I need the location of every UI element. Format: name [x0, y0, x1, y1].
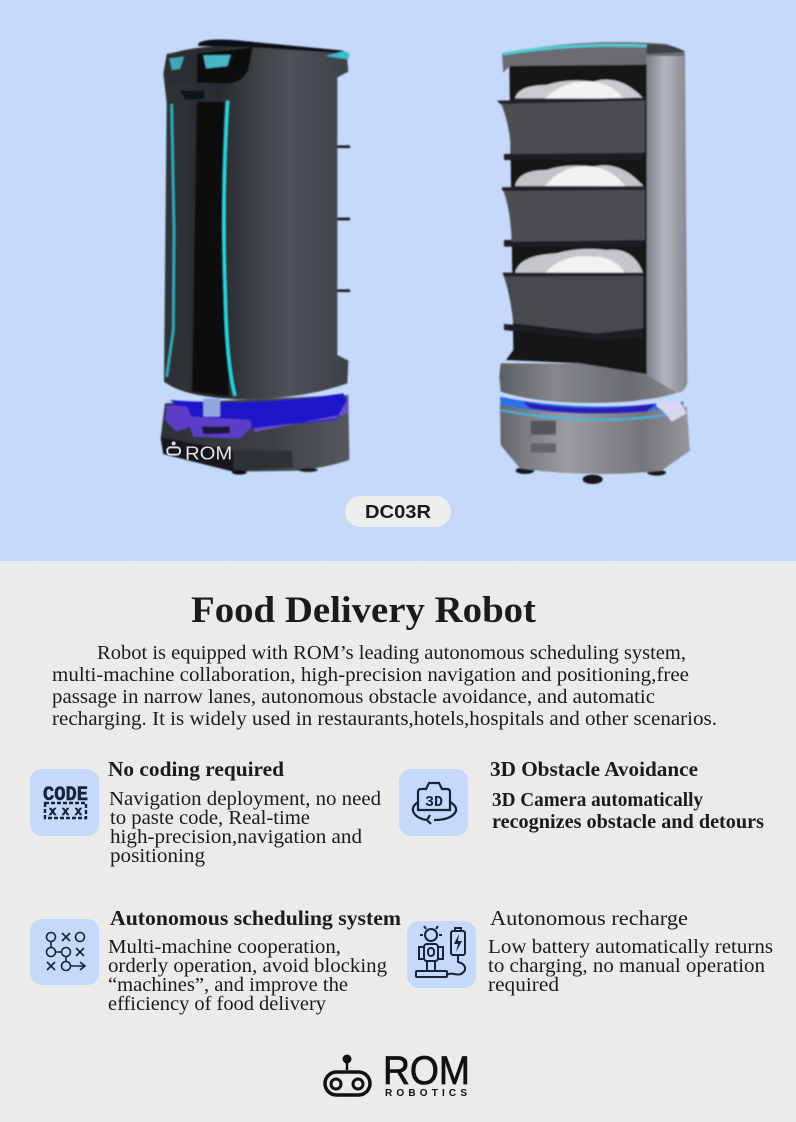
description: autonomous scheduling system: Multi-machine cooperation, [108, 936, 341, 958]
illustration: DC03R robot, open tray view [497, 42, 690, 484]
icon: code: CODE [43, 784, 88, 807]
illustration: DC03R robot, closed front view [161, 39, 350, 475]
title: Food Delivery Robot [191, 590, 537, 631]
icon: 3D camera [399, 769, 468, 836]
description: no coding required: to paste code, Real-time [110, 807, 310, 829]
description: autonomous scheduling system: efficiency of food delivery [108, 993, 326, 1015]
logo on robot base: ROM [185, 442, 232, 463]
feature: autonomous recharge [407, 906, 773, 996]
intro paragraph: Robot is equipped with ROM’s leading autonomous scheduling system, [97, 642, 686, 664]
panel: textured description background [0, 561, 796, 1122]
description: autonomous recharge: required [488, 974, 559, 996]
icon: code [30, 769, 99, 836]
model label pill: DC03R [365, 501, 431, 522]
description: autonomous recharge [488, 936, 773, 996]
model label pill [345, 496, 451, 527]
icon: robot charging [407, 921, 476, 988]
panel: product hero background [0, 0, 796, 561]
icon: code: xxx [49, 803, 83, 818]
description: 3D obstacle avoidance: 3D Camera automatically [492, 789, 703, 811]
intro paragraph: recharging. It is widely used in restaurants,hotels,hospitals and other scenarios. [52, 708, 717, 730]
description: no coding required: high-precision,navigation and [110, 826, 362, 848]
logo on robot base [167, 441, 232, 463]
description: autonomous recharge: Low battery automatically returns [488, 936, 773, 958]
description: autonomous scheduling system: “machines”, and improve the [108, 974, 348, 996]
icon: strategy diagram [30, 919, 99, 985]
description: 3D obstacle avoidance: recognizes obstacle and detours [492, 811, 764, 833]
heading: 3D obstacle avoidance: 3D Obstacle Avoidance [490, 757, 698, 781]
description: no coding required: positioning [110, 845, 205, 867]
feature: autonomous scheduling system [30, 906, 402, 1015]
tagline: ROBOTICS [385, 1088, 467, 1099]
intro paragraph [52, 642, 717, 730]
heading: autonomous recharge: Autonomous recharge [490, 906, 688, 930]
description: autonomous scheduling system [108, 936, 387, 1015]
description: no coding required: Navigation deployment, no need [109, 788, 381, 810]
description: autonomous scheduling system: orderly operation, avoid blocking [108, 955, 387, 977]
wordmark: ROM [383, 1049, 470, 1093]
intro paragraph: passage in narrow lanes, autonomous obstacle avoidance, and automatic [52, 686, 655, 708]
icon: 3D camera: 3D [425, 794, 443, 811]
feature: no coding required [30, 757, 381, 867]
intro paragraph: multi-machine collaboration, high-precision navigation and positioning,free [52, 664, 689, 686]
description: 3D obstacle avoidance [492, 789, 764, 833]
icon: robot head logo [325, 1054, 370, 1095]
heading: autonomous scheduling system: Autonomous scheduling system [110, 906, 402, 930]
logo: ROM Robotics [325, 1049, 470, 1099]
description: no coding required [109, 788, 381, 867]
heading: no coding required: No coding required [108, 757, 284, 781]
description: autonomous recharge: to charging, no manual operation [488, 955, 765, 977]
feature: 3D obstacle avoidance [399, 757, 764, 836]
